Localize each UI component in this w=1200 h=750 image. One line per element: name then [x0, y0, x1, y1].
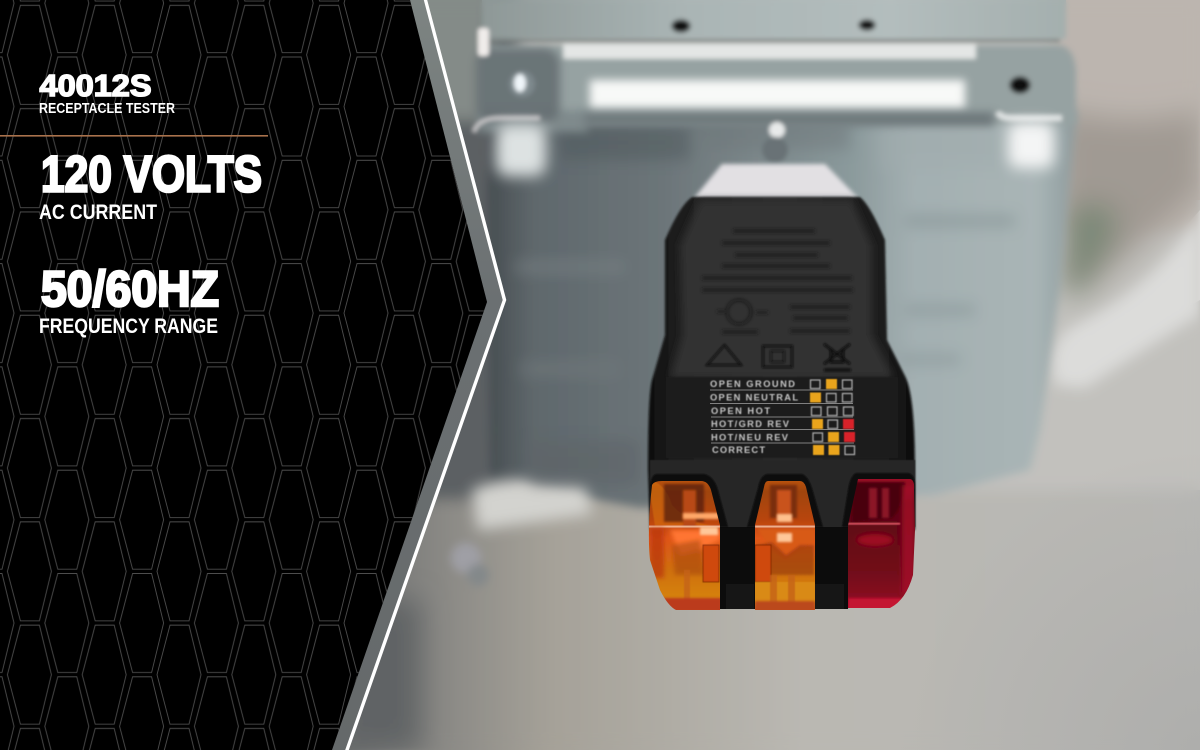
honeycomb pattern — [0, 0, 487, 750]
frequency spec — [39, 261, 219, 338]
legend row labels: CORRECT — [712, 445, 765, 455]
legend indicator squares — [810, 379, 855, 455]
legend row labels — [710, 379, 798, 455]
middle amber lens — [755, 481, 815, 610]
copper divider — [0, 135, 268, 137]
lens collars — [650, 473, 915, 527]
box mottling — [515, 120, 1020, 485]
cover plate top — [480, 45, 1076, 125]
front face of the body — [670, 200, 894, 378]
plug blade top — [694, 164, 858, 198]
product model heading: 40012S — [40, 68, 152, 103]
voltage spec — [39, 145, 262, 224]
frequency spec: 50/60HZ — [41, 261, 219, 317]
product name: RECEPTACLE TESTER — [39, 101, 175, 117]
left corner with screw — [474, 28, 560, 176]
pale curved strip — [1052, 215, 1200, 388]
legend row labels: OPEN GROUND — [710, 379, 795, 389]
lit ledge under the box — [472, 480, 592, 530]
legend row labels: HOT/NEU REV — [711, 432, 789, 442]
left black panel — [0, 0, 487, 750]
status legend sticker — [666, 377, 898, 458]
round blurred spot — [451, 543, 489, 586]
box top band — [482, 0, 1066, 39]
legend row labels: OPEN NEUTRAL — [710, 392, 798, 402]
chevron edge: white line — [345, 0, 506, 750]
center screw — [762, 122, 788, 163]
voltage spec: 120 VOLTS — [41, 145, 262, 202]
tester body — [648, 197, 915, 530]
right corner with hole — [998, 112, 1062, 168]
legend row labels: OPEN HOT — [711, 406, 770, 416]
holes in the box — [672, 20, 1030, 93]
sticker background — [666, 377, 898, 458]
legend row labels: HOT/GRD REV — [711, 419, 790, 429]
voltage caption: AC CURRENT — [39, 201, 157, 224]
product model heading — [39, 68, 175, 117]
bright metal highlights — [478, 44, 994, 132]
icon: crossed-out bin — [824, 344, 851, 370]
right red lens — [848, 479, 915, 608]
chevron edge: grey band — [332, 0, 505, 750]
icon: warning triangle — [707, 345, 741, 365]
blurred moulded print — [702, 229, 853, 334]
lower black housing — [650, 460, 915, 608]
lower box body — [486, 110, 1077, 508]
left amber lens — [648, 481, 720, 610]
product: receptacle tester — [640, 164, 920, 615]
darker floor corner — [900, 450, 1200, 750]
icon: double insulated square — [763, 346, 792, 367]
shaded wall and green tint — [340, 110, 1200, 750]
frequency caption: FREQUENCY RANGE — [39, 315, 218, 338]
